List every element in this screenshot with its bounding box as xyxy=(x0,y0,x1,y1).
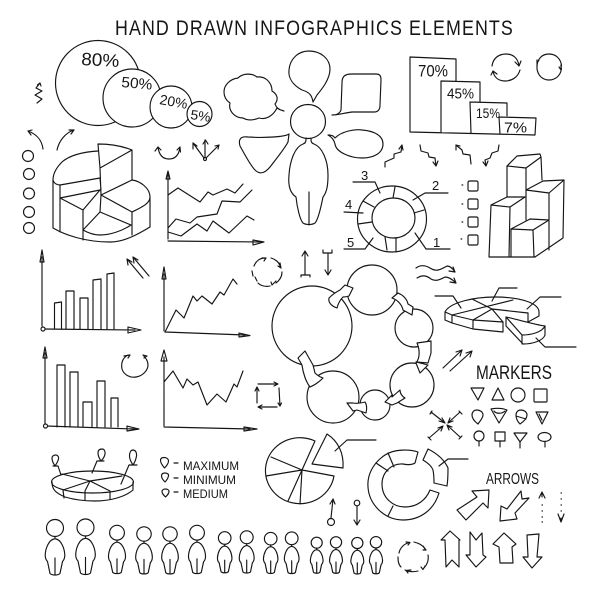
chart: three line graph xyxy=(166,171,264,245)
panel: percent bubbles xyxy=(56,40,212,128)
connector arrow 1 xyxy=(329,285,353,308)
chart: exploded 3D pie xyxy=(53,144,150,242)
icon: dotted down arrow xyxy=(558,493,564,522)
icon: arrows pointing to centre xyxy=(428,411,462,440)
large person figure xyxy=(289,104,328,225)
connector arrow 6 xyxy=(298,351,323,387)
speech bubble: triangle xyxy=(239,134,289,173)
bubble 50% xyxy=(103,69,161,127)
connector arrow 4 xyxy=(385,390,405,405)
icon: three arrows from a point xyxy=(193,140,219,160)
chart: line chart fluctuating xyxy=(161,350,257,431)
icon: double arrows up-left xyxy=(127,257,149,278)
bar labels: 7% xyxy=(504,120,527,136)
icon: circular arrows pair right xyxy=(537,54,562,80)
chart: bar chart mixed xyxy=(43,347,139,431)
chart: bar chart rising xyxy=(40,250,141,333)
icon: wavy arrows xyxy=(416,266,456,283)
percent labels for bubbles: 50% xyxy=(121,74,153,94)
icon: arrow down with circle xyxy=(354,500,360,525)
percent labels for bubbles: 20% xyxy=(158,91,189,112)
bubble 20% xyxy=(150,86,192,128)
bar labels: 70% xyxy=(418,62,448,80)
icon: squiggle arrow xyxy=(35,83,42,103)
checklist squares xyxy=(461,181,478,245)
bar labels xyxy=(418,62,527,136)
speech bubble: cloud xyxy=(224,74,284,120)
bubble 5% xyxy=(187,102,212,126)
chart: 3D pie with cut slice xyxy=(435,288,576,347)
arrow shapes xyxy=(441,490,542,568)
legend: marker meanings: MEDIUM xyxy=(183,487,228,501)
chart: stepped percent bars xyxy=(410,57,536,136)
connector arrow 2 xyxy=(392,293,413,315)
title: HAND DRAWN INFOGRAPHICS ELEMENTS xyxy=(115,17,513,40)
percent labels for bubbles: 80% xyxy=(81,49,120,71)
heading: markers: MARKERS xyxy=(476,363,552,384)
chart: line chart rising xyxy=(162,267,250,337)
chart: flat pie with pulled slice xyxy=(265,434,376,504)
chart: segmented ring with numbers xyxy=(344,168,450,252)
chart: small 3D pie with pins xyxy=(52,449,137,501)
icon: dashed circle bottom xyxy=(398,542,428,573)
chart: cycle of connected circles xyxy=(272,265,434,423)
ring numbers xyxy=(345,168,440,250)
percent labels for bubbles: 5% xyxy=(190,107,211,125)
icon: circular arrows pair left xyxy=(491,54,521,81)
speech bubble: round top xyxy=(289,51,330,102)
row of people icons xyxy=(45,519,383,575)
connector arrow 3 xyxy=(416,341,431,373)
speech bubble: oval xyxy=(328,130,383,158)
ring numbers: 1 xyxy=(433,235,440,250)
bar labels: 45% xyxy=(447,86,474,102)
icon: dotted up arrow xyxy=(539,492,545,522)
legend: marker meanings xyxy=(160,458,239,501)
marker set xyxy=(471,388,551,448)
chart: broken ring xyxy=(368,449,468,520)
ring numbers: 2 xyxy=(432,178,439,193)
zigzag arrows row xyxy=(385,145,499,167)
legend: marker meanings: MAXIMUM xyxy=(183,459,239,473)
icon: rotating arrows circle xyxy=(122,355,148,377)
icon: curved arrows above pie xyxy=(28,130,74,150)
percent labels for bubbles xyxy=(81,49,211,125)
icon: dashed rotating circle xyxy=(252,258,282,286)
icon: down arrow with top bar xyxy=(323,250,332,275)
speech bubble: rounded rectangle xyxy=(332,74,381,115)
icon: U arrow xyxy=(155,147,180,159)
icon: arrow up with circle xyxy=(328,499,335,526)
list of circles xyxy=(22,150,34,234)
icon: double arrows up-right xyxy=(443,350,472,371)
ring numbers: 5 xyxy=(347,235,354,250)
connector arrow 5 xyxy=(347,402,367,413)
legend: marker meanings: MINIMUM xyxy=(183,473,236,487)
chart: 3D stepped blocks xyxy=(489,154,564,257)
bubble 80% xyxy=(56,40,140,126)
ring numbers: 3 xyxy=(361,168,368,183)
heading: arrows: ARROWS xyxy=(486,471,539,488)
ring numbers: 4 xyxy=(345,197,352,212)
icon: up arrow with base xyxy=(301,251,310,277)
bar labels: 15% xyxy=(476,106,500,121)
icon: square arrows xyxy=(255,382,282,409)
